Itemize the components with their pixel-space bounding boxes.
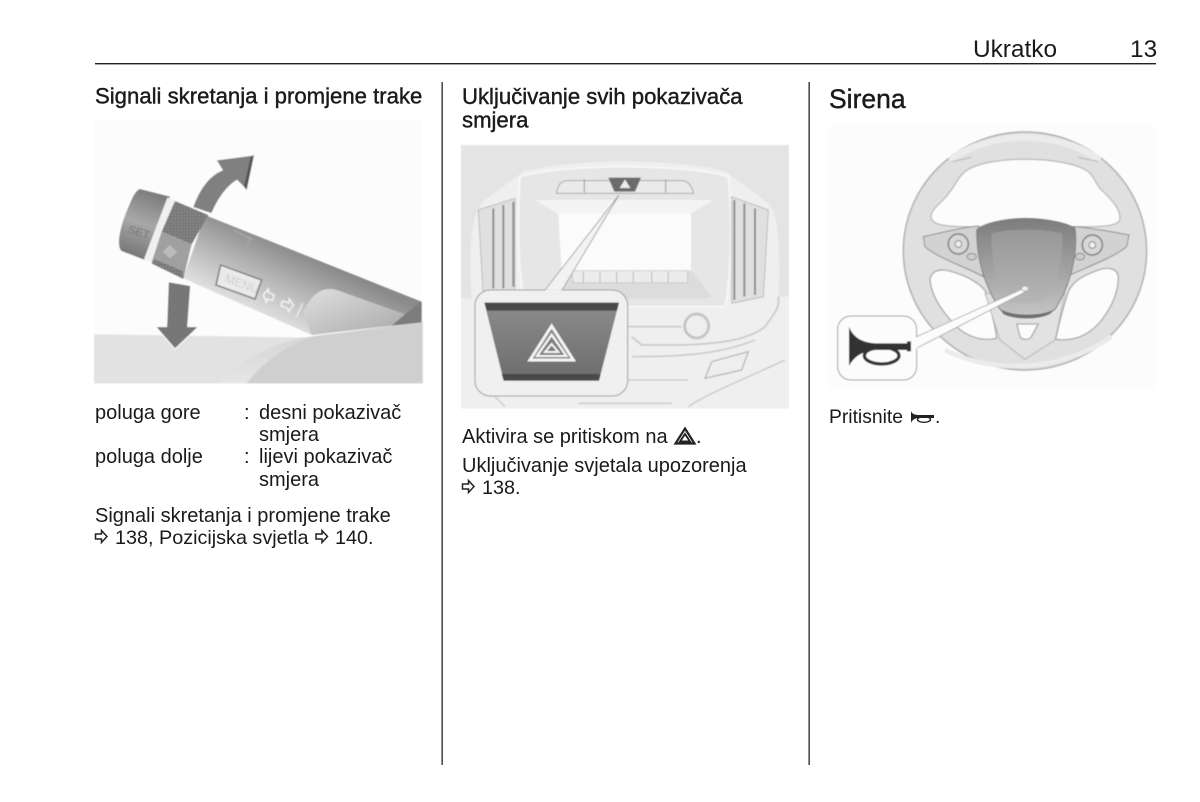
icon: hazard triangle [530,326,573,360]
panel: hazard lights [461,84,789,499]
upper opening [931,159,1120,227]
activation text: . [696,426,702,448]
lever direction table [95,402,401,491]
lever cap [119,189,170,260]
heading: hazard lights: smjera [462,108,529,132]
cross reference text: 138. [482,477,521,499]
illustration: turn signal lever with up and down arrows: MENU [223,271,261,297]
section name: Ukratko [973,36,1057,63]
small hazard switch [608,178,641,192]
lever direction table: smjera [259,424,320,446]
icon: reference arrow [96,530,107,542]
activation text: Aktivira se pritiskom na [462,426,668,448]
cross reference text: Uključivanje svjetala upozorenja [462,455,747,477]
icon: reference arrow [316,530,328,542]
cross reference text: Signali skretanja i promjene trake [95,505,391,527]
air vents [478,198,515,297]
lever direction table: : [244,402,250,424]
page number: 13 [1130,36,1157,63]
illustration: turn signal lever with up and down arrows [94,120,423,383]
arrow: lever down [156,282,199,349]
illustration: dashboard with hazard button [461,145,789,408]
cross reference text: 140. [335,527,374,549]
heading: horn: Sirena [829,84,906,114]
instruction text: . [935,407,940,428]
callout: horn icon [838,316,917,380]
left control pad [923,226,983,277]
instruction text [829,407,940,428]
cross reference text [462,455,747,499]
arrow: lever up [193,155,254,214]
lower openings [930,270,997,339]
wheel rim [903,132,1147,370]
lever direction table: poluga gore [95,402,201,424]
lever direction table: smjera [259,469,320,491]
top switch row [557,181,693,193]
heading: turn signals: Signali skretanja i promjene trake [95,84,422,108]
airbag cover [977,218,1076,315]
dial [685,314,709,338]
heading: hazard lights [462,84,743,132]
instruction text: Pritisnite [829,407,903,428]
heading: hazard lights: Uključivanje svih pokazivača [462,84,743,109]
page header [95,36,1157,64]
MENU button [216,265,262,299]
panel: horn [829,84,1156,428]
icon: horn [849,327,911,366]
illustration: turn signal lever with up and down arrows: SET [126,224,151,242]
callout lines [545,195,619,291]
lever direction table: : [244,446,250,468]
lever body [183,215,422,335]
center screen [535,200,713,214]
panel: turn signals [94,84,423,549]
right control pad [1070,227,1129,275]
lever direction table: lijevi pokazivač [259,446,392,468]
lever direction table: poluga dolje [95,446,203,468]
cross reference text: 138, Pozicijska svjetla [115,527,309,549]
icon: hazard triangle inline [676,428,694,444]
icon: reference arrow [462,480,474,492]
cross reference text [95,505,391,549]
illustration: steering wheel with horn callout [829,125,1156,388]
callout lines [915,289,1025,349]
lever direction table: desni pokazivač [259,402,401,424]
center spoke [985,293,1065,359]
callout: enlarged hazard button [475,290,628,396]
icon: horn inline [911,411,934,423]
